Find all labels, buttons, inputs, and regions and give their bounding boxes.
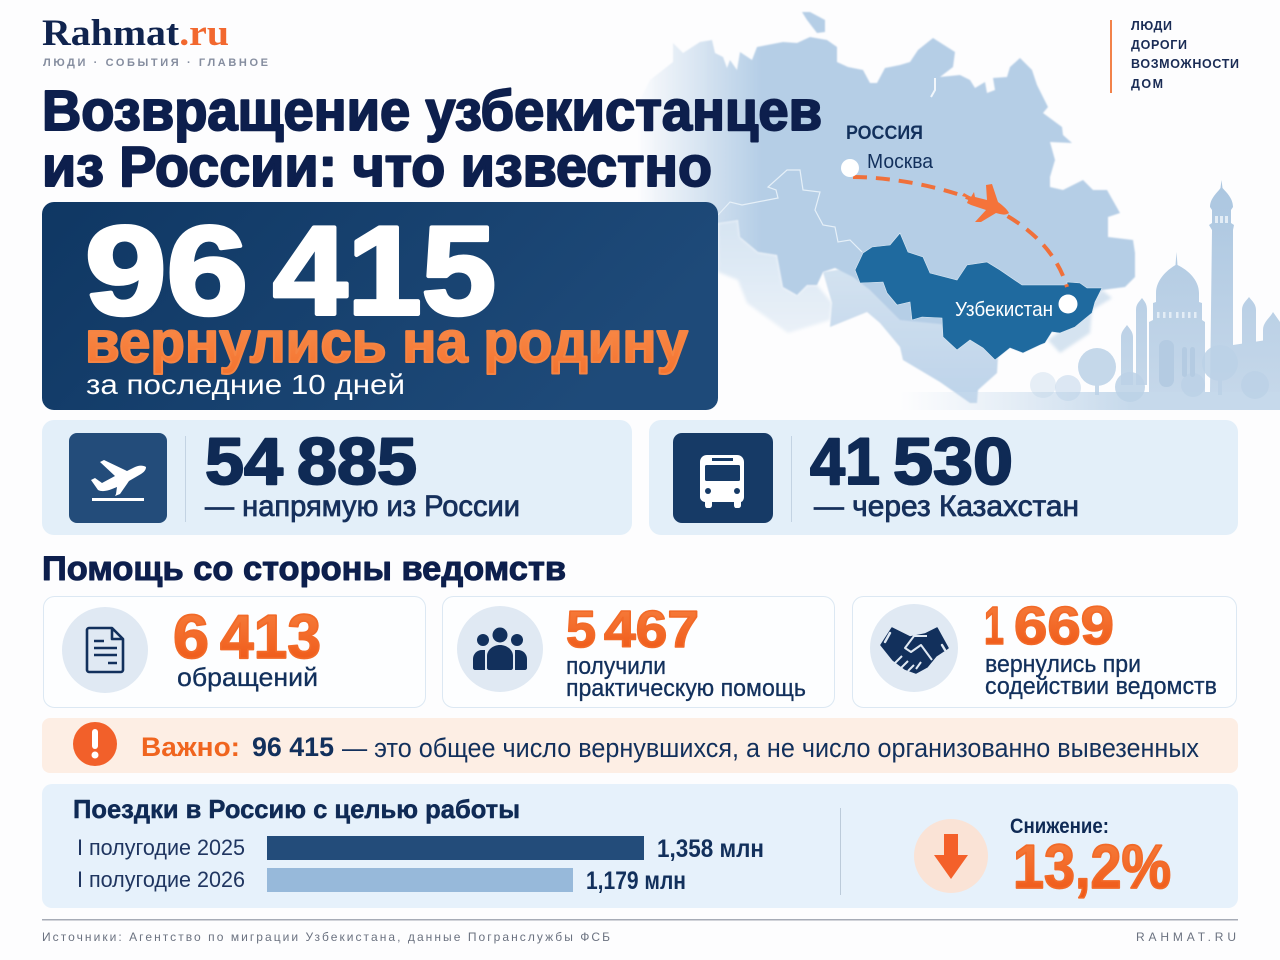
decrease value: 13,2%	[1013, 833, 1171, 902]
number: 530	[893, 424, 1013, 498]
label: — напрямую из России	[205, 490, 520, 523]
map: pale southern region	[718, 220, 832, 333]
number: 467	[604, 601, 699, 659]
hero number: 96	[85, 200, 248, 341]
label: Uzbekistan: Узбекистан	[955, 299, 1053, 321]
decrease label: Снижение:	[1010, 815, 1109, 838]
label: — через Казахстан	[814, 490, 1079, 523]
label	[985, 651, 1217, 700]
number: 54	[205, 424, 283, 498]
icon: bus	[673, 433, 773, 523]
panel: returned with agency support	[852, 596, 1236, 708]
label: получили	[566, 653, 666, 680]
label	[566, 653, 806, 702]
title	[42, 79, 822, 199]
marker: Moscow	[841, 159, 859, 177]
panel: hero total	[42, 200, 718, 410]
number: 6	[173, 603, 209, 672]
number: 41	[810, 424, 880, 498]
label: обращений	[177, 662, 318, 692]
title: Возвращение узбекистанцев	[42, 79, 822, 143]
label: содействии ведомств	[985, 673, 1217, 700]
footer: site: RAHMAT.RU	[1136, 930, 1236, 944]
panel heading: Поездки в Россию с целью работы	[73, 794, 520, 824]
bar chart	[77, 835, 764, 895]
number	[205, 424, 417, 498]
bar chart: I полугодие 2025	[77, 835, 245, 860]
label: Russia: РОССИЯ	[846, 123, 923, 144]
hero number: 415	[273, 200, 496, 341]
footer: sources: Источники: Агентство по миграции Узбекистана, данные Погранслужбы ФСБ	[42, 930, 610, 944]
marker: Uzbekistan	[1058, 294, 1078, 314]
bar chart: I полугодие 2026	[77, 867, 245, 892]
top right tags: ДОМ	[1131, 77, 1163, 91]
number: 669	[1014, 596, 1114, 656]
panel: practical help	[442, 596, 834, 708]
hero caption: за последние 10 дней	[86, 369, 405, 400]
icon: warning	[73, 722, 117, 766]
number: 5	[566, 601, 596, 659]
map: eastern lower lobe	[1048, 290, 1112, 353]
map: lower lobe	[823, 268, 1010, 403]
map: Russia shape	[640, 12, 1135, 330]
logo	[42, 13, 268, 69]
number	[810, 424, 1013, 498]
icon: departing plane	[69, 433, 167, 523]
bar chart: 1,179 млн	[586, 867, 686, 895]
heading: agency help: Помощь со стороны ведомств	[42, 550, 566, 588]
label: практическую помощь	[566, 675, 806, 702]
map: Uzbekistan	[855, 233, 1102, 360]
number: 1	[984, 596, 1004, 656]
title: из России: что известно	[42, 135, 712, 199]
icon: people	[457, 606, 543, 692]
callout: important note: 96 415	[252, 732, 334, 762]
number: 885	[297, 424, 417, 498]
map: northern inlet	[931, 78, 935, 97]
number	[984, 596, 1114, 656]
logo tagline: ЛЮДИ · СОБЫТИЯ · ГЛАВНОЕ	[43, 57, 268, 69]
number: 413	[220, 603, 321, 672]
hero subtitle: вернулись на родину	[85, 310, 688, 375]
map: border line	[718, 170, 862, 252]
map: Russia and Central Asia with route	[640, 12, 1135, 403]
panel: requests	[44, 596, 426, 708]
route: dashed arrow Moscow to Uzbekistan	[853, 177, 1067, 287]
top right tags: ЛЮДИ	[1131, 19, 1172, 33]
callout: important note: Важно:	[141, 732, 240, 762]
logo: Rahmat .ru	[42, 13, 229, 54]
icon: document	[62, 607, 148, 693]
skyline: mosque silhouette	[860, 180, 1280, 410]
top right tags: ВОЗМОЖНОСТИ	[1131, 57, 1239, 71]
label: Moscow: Москва	[867, 151, 934, 173]
callout: important note	[42, 718, 1238, 773]
panel: work trips to Russia	[42, 784, 1238, 908]
label: вернулись при	[985, 651, 1141, 678]
panel: direct from Russia	[42, 420, 632, 535]
number	[566, 601, 699, 659]
top right tags	[1110, 19, 1239, 93]
hero number	[85, 200, 496, 341]
number	[173, 603, 321, 672]
panel: via Kazakhstan	[649, 420, 1238, 535]
callout: important note: — это общее число вернувшихся, а не число организованно вывезенных	[342, 733, 1199, 763]
top right tags: ДОРОГИ	[1131, 38, 1187, 52]
icon: handshake	[870, 604, 958, 692]
icon: plane on route	[962, 184, 1009, 222]
icon: down arrow	[914, 819, 988, 893]
bar chart: 1,358 млн	[657, 835, 764, 863]
